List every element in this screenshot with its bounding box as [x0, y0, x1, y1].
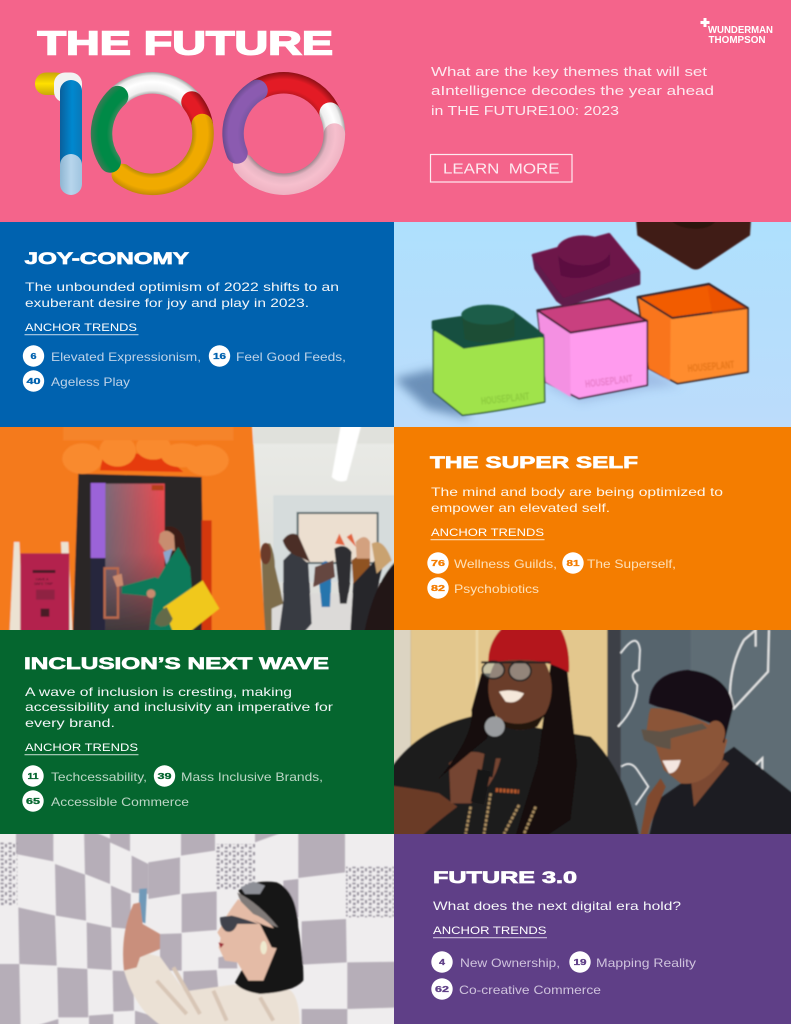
- list: Future trends: New Ownership,: [460, 956, 560, 970]
- list: Joy-conomy trends: 40: [26, 377, 41, 386]
- list: Joy-conomy trends: Feel Good Feeds,: [236, 350, 346, 364]
- list: Inclusion trends: Mass Inclusive Brands,: [181, 770, 323, 784]
- woman: [647, 747, 791, 843]
- list: Future trends: Co-creative Commerce: [459, 983, 602, 997]
- hair: [235, 882, 303, 994]
- text block: Super Self description: empower an elevated self.: [431, 501, 610, 515]
- panel: The Super Self: [394, 427, 791, 630]
- green box: [433, 305, 545, 415]
- wall chalk: [618, 630, 769, 805]
- list: Joy-conomy trends: 16: [213, 352, 227, 361]
- text block: Joy-conomy description: The unbounded optimism of 2022 shifts to an: [25, 280, 339, 294]
- pink box: HOUSEPLANT: [585, 373, 634, 391]
- logo: Wunderman Thompson: THOMPSON: [708, 35, 766, 46]
- heading: Future 3.0: FUTURE 3.0: [433, 869, 577, 887]
- list: Inclusion trends: 39: [158, 772, 172, 781]
- text block: Inclusion description: [25, 685, 333, 730]
- photo: Houseplant boxes: [394, 215, 791, 427]
- man: [387, 717, 641, 843]
- panel: Inclusion's Next Wave: [0, 630, 394, 834]
- list: Super Self trends: The Superself,: [587, 557, 676, 571]
- icon: first tube zero: [102, 83, 203, 184]
- text block: Inclusion description: accessibility and inclusivity an imperative for: [25, 700, 333, 714]
- list: Inclusion trends: Techcessability,: [51, 770, 147, 784]
- doorway: [73, 474, 204, 637]
- list: Super Self trends: 82: [431, 584, 446, 593]
- face: [217, 899, 278, 981]
- text block: Future description: What does the next digital era hold?: [433, 899, 682, 913]
- text block: Joy-conomy description: [25, 280, 339, 310]
- text block: intro: in THE FUTURE100: 2023: [431, 103, 619, 118]
- photo: woman photographing checker room: [0, 827, 403, 1024]
- heading: Inclusion's Next Wave: INCLUSION’S NEXT WAVE: [24, 655, 329, 673]
- hall details: [252, 427, 394, 445]
- orange box: [637, 284, 748, 384]
- orange tent: [0, 420, 266, 637]
- heading: Joy-conomy: JOY-CONOMY: [24, 250, 189, 268]
- scallops: [62, 427, 234, 476]
- list: Joy-conomy trends: Elevated Expressionism,: [51, 350, 201, 364]
- list: Super Self trends: 81: [566, 559, 580, 568]
- list: Inclusion trends: Accessible Commerce: [51, 795, 190, 809]
- panel: Joy-conomy: [0, 222, 394, 427]
- title: The Future: THE FUTURE: [38, 24, 333, 62]
- text block: intro: What are the key themes that will set: [431, 64, 708, 79]
- list: Joy-conomy trends: Ageless Play: [51, 375, 130, 389]
- label: anchor trends: ANCHOR TRENDS: [433, 925, 546, 937]
- list: Inclusion trends: 65: [26, 797, 41, 806]
- list: Super Self trends: Wellness Guilds,: [454, 557, 557, 571]
- list: Inclusion trends: [22, 765, 323, 812]
- maroon lid: [533, 235, 639, 305]
- list: Super Self trends: [427, 552, 676, 599]
- list: Future trends: [431, 951, 696, 1000]
- woman in green coat: [166, 526, 188, 564]
- button: learn more: LEARN MORE: [443, 162, 560, 178]
- text block: intro: aIntelligence decodes the year ahead: [431, 83, 714, 98]
- pink box: [537, 299, 647, 399]
- label: anchor trends: ANCHOR TRENDS: [25, 322, 137, 334]
- text block: Super Self description: [431, 485, 724, 515]
- photo: inflatable orange entrance: [0, 420, 400, 638]
- sweater: [124, 953, 300, 1024]
- photo: two laughing speakers: [387, 623, 791, 843]
- list: Joy-conomy trends: 6: [30, 352, 37, 361]
- hands and phone: [139, 888, 147, 923]
- list: Future trends: 4: [439, 958, 446, 967]
- text block: Super Self description: The mind and body are being optimized to: [431, 485, 724, 499]
- orange box: HOUSEPLANT: [687, 359, 735, 375]
- logo: Wunderman Thompson: WUNDERMAN: [708, 25, 773, 36]
- list: Super Self trends: Psychobiotics: [454, 582, 539, 596]
- green box: HOUSEPLANT: [480, 391, 530, 408]
- icon: tube numeral one: [35, 72, 82, 195]
- photo: inflatable orange entrance: HAVE A: [36, 577, 49, 581]
- heading: The Super Self: THE SUPER SELF: [430, 454, 638, 472]
- yellow bag: [163, 580, 219, 637]
- panel: hero header: [0, 0, 791, 222]
- text block: intro: [431, 64, 714, 118]
- list: Super Self trends: 76: [431, 559, 446, 568]
- label: anchor trends: ANCHOR TRENDS: [431, 527, 544, 539]
- crowd: [262, 543, 283, 637]
- text block: Inclusion description: every brand.: [25, 716, 115, 730]
- list: Future trends: 19: [574, 958, 587, 967]
- list: Inclusion trends: 11: [28, 772, 39, 781]
- label: anchor trends: ANCHOR TRENDS: [25, 742, 138, 754]
- brown lid: [636, 215, 751, 269]
- icon: second tube zero: [233, 83, 334, 184]
- logo: Wunderman Thompson: [700, 18, 773, 46]
- text block: Inclusion description: A wave of inclusion is cresting, making: [25, 685, 292, 699]
- photo: inflatable orange entrance: SAFE TRIP: [34, 582, 53, 586]
- list: Future trends: 62: [435, 985, 450, 994]
- text block: Joy-conomy description: exuberant desire for joy and play in 2023.: [25, 296, 309, 310]
- list: Future trends: Mapping Reality: [596, 956, 696, 970]
- sign: [9, 542, 73, 637]
- list: Joy-conomy trends: [23, 345, 346, 392]
- button: learn more: [430, 154, 572, 182]
- panel: Future 3.0: [394, 834, 791, 1024]
